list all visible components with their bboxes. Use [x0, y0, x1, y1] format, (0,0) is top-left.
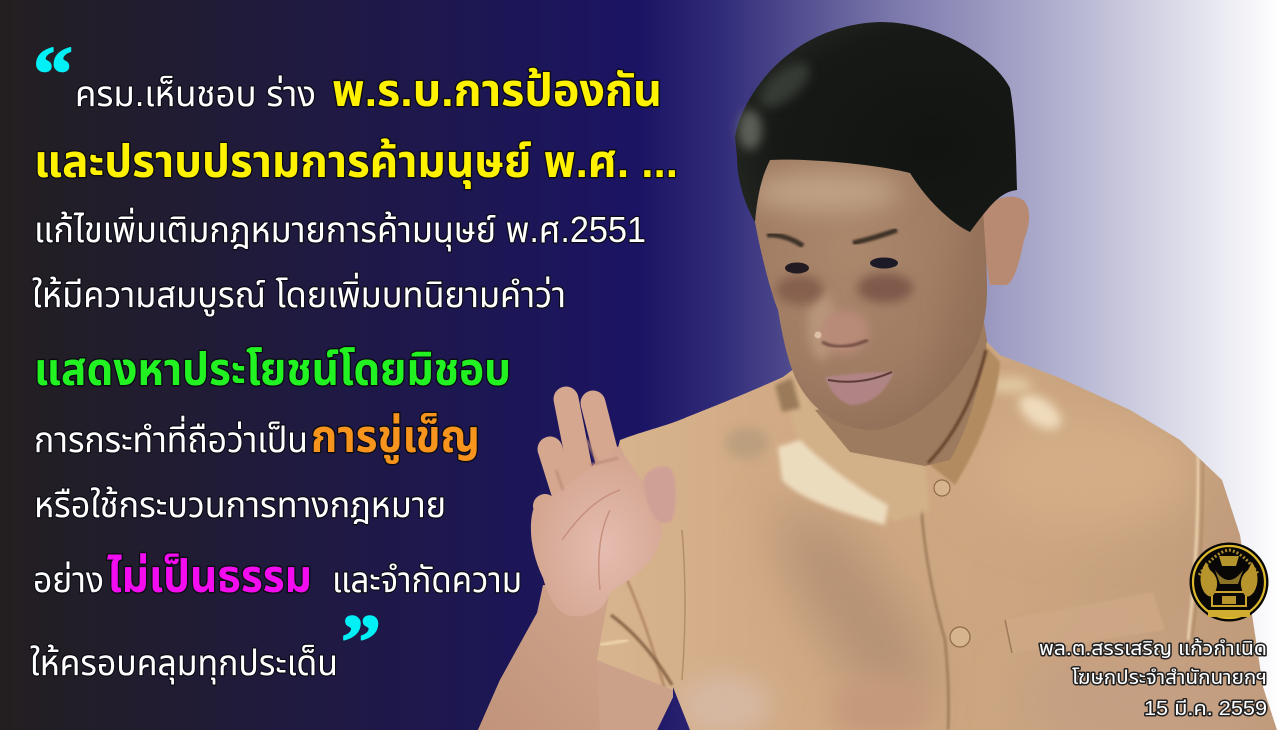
line with magenta highlight	[33, 551, 522, 602]
government seal	[1190, 542, 1268, 622]
raised hand	[531, 399, 676, 730]
body line 9: ให้ครอบคลุมทุกประเด็น	[30, 642, 338, 684]
headline line 1: พ.ร.บ.การป้องกัน	[332, 65, 662, 116]
line with magenta highlight: อย่าง	[33, 559, 104, 600]
portrait of spokesperson	[470, 22, 1280, 730]
spokesperson caption: โฆษกประจำสำนักนายกฯ	[1072, 667, 1267, 689]
line with orange highlight: การกระทำที่ถือว่าเป็น	[34, 415, 308, 460]
body line 7: หรือใช้กระบวนการทางกฎหมาย	[34, 484, 446, 525]
body line 4: ให้มีความสมบูรณ์ โดยเพิ่มบทนิยามคำว่า	[32, 272, 566, 316]
shirt buttons	[934, 480, 970, 647]
closing quotation mark: ”	[341, 598, 381, 685]
ear	[983, 197, 1029, 285]
spokesperson caption	[1039, 637, 1267, 720]
forearm	[478, 585, 612, 730]
line with magenta highlight: และจำกัดความ	[332, 559, 522, 600]
shirt pocket	[1145, 595, 1162, 630]
line with orange highlight: การขู่เข็ญ	[311, 411, 480, 464]
shirt body	[470, 340, 1280, 730]
eyes, brows, nose, mouth	[767, 230, 898, 405]
line with orange highlight	[34, 411, 480, 464]
spokesperson caption: 15 มี.ค. 2559	[1144, 698, 1267, 720]
hair	[735, 22, 1017, 232]
shirt collar and satin highlight	[775, 345, 1000, 525]
headline line 1: ครม.เห็นชอบ ร่าง	[75, 73, 316, 114]
headline line 2: และปราบปรามการค้ามนุษย์ พ.ศ. ...	[34, 136, 678, 189]
neck and face	[754, 160, 988, 466]
opening quotation mark: “	[33, 30, 73, 117]
green highlight line: แสดงหาประโยชน์โดยมิชอบ	[34, 344, 511, 395]
fingers	[545, 399, 608, 540]
spokesperson caption: พล.ต.สรรเสริญ แก้วกำเนิด	[1039, 637, 1267, 660]
headline line 1	[75, 65, 662, 116]
body line 3: แก้ไขเพิ่มเติมกฎหมายการค้ามนุษย์ พ.ศ.2551	[34, 207, 646, 251]
line with magenta highlight: ไม่เป็นธรรม	[107, 551, 312, 602]
